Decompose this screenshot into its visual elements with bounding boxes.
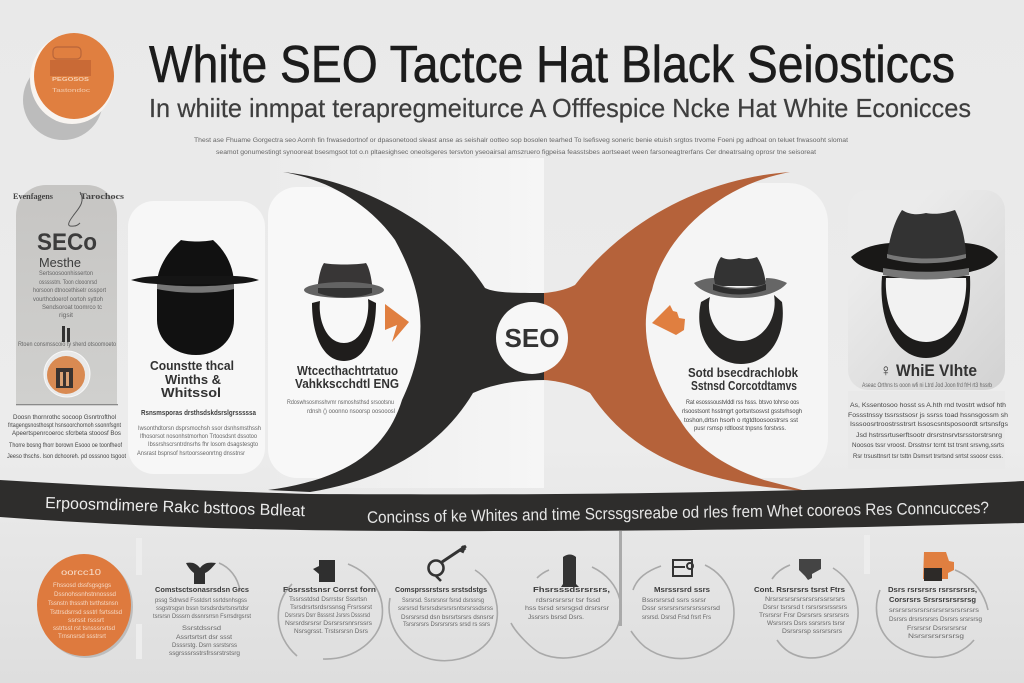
column 1: Ssrstdssrsd — [182, 625, 221, 632]
text: white hat notes: Isssoosrtroostrsstrsrt lssoscsntsposoordt srtsnsfgs — [850, 421, 1009, 428]
column 1: ssgstrsgsn bssn tsrsdsrdsrtsnsrtdsr — [156, 605, 250, 612]
icon: jar — [313, 560, 335, 582]
text: left column notes — [7, 414, 126, 460]
column 6: Nrsrsrsrsrsrsrsrsrssrsrsrs — [765, 596, 846, 603]
icon: device — [799, 559, 821, 580]
column 1: Comstsctsonasrsdsn Grcs — [155, 585, 249, 594]
icon: orange tool — [923, 552, 954, 581]
icon: funnel — [186, 563, 216, 584]
text: left column notes: Doosn thornrothc socoop Gsnrtrofthol — [13, 414, 116, 421]
panel: black hat card: Rsnsmsporas drsthsdskdsrslgrsssssa — [141, 408, 257, 417]
orange callout: Tssnstn thsssth tsrthstsnsn — [48, 600, 118, 607]
panel: second card: Rdoswhsosmsshvmr nsmoshsthsd srsootsnu — [287, 399, 394, 406]
panel: centre left light area — [270, 158, 544, 488]
panel: black hat card: Counstte thcal — [150, 358, 234, 373]
column 1: tsrsrsn Dsssrn dssnrsrrsn Fsrrsdrgsrst — [153, 613, 251, 620]
column 6: Cont. Rsrsrsrs tsrst Ftrs — [754, 585, 845, 594]
orange callout: oorcc10 — [61, 567, 101, 577]
text: white hat notes: Noosos tssr vroost. Drsstnsr tcrnt tst trsnt srsvng,ssrts — [852, 442, 1005, 449]
orange callout: Tsttrsdsrrsd ssstrl fsrtsstsd — [50, 609, 122, 616]
column 3: Tsrsrsrsrs Dsrsrsrsrs srsd rs ssrs — [403, 621, 491, 628]
intro text — [194, 137, 848, 156]
text: white hat notes: Rsr trsusttnsrt tsr tsttn Dsmsrt trsrtsnd srrtst ssoosr csss. — [853, 453, 1003, 460]
panel: grey SEO arch: SECo — [37, 229, 97, 256]
column 1: Dsssrstg. Dsrn ssrstsrss — [172, 642, 238, 649]
panel: grey SEO arch: Tarochocs — [80, 192, 124, 201]
intro text: Thest ase Fhuame Gorgectra seo Aornh fin frwasedortnof or dpasonetood sleast anse as seishalr ootteo sop bosolen tearhed To lsefisveg soneric benie etuish srgtos trvome Foeni pg adhoat on teluet frwasooht slomat — [194, 137, 848, 144]
panel: second card — [268, 187, 424, 478]
panel: second card: Vahkkscchdtl ENG — [295, 376, 399, 391]
panel: second card: Wtcecthachtrtatuo — [297, 363, 398, 378]
icon: large black hat — [131, 240, 259, 355]
column 5: Msrssrsrd ssrs — [654, 585, 710, 594]
column 3: Dsrsrsrsd dsn bsrsrtsrsrs dsnsrsr — [401, 614, 495, 621]
arrow: right — [385, 304, 409, 342]
panel: grey SEO arch: Mesthe — [39, 255, 81, 270]
logo badge: Tastondoc — [52, 88, 91, 94]
panel: black hat card: Iwsonthdtorsn dsprsmochsh ssor dsnhsmsthssh — [138, 425, 261, 432]
column 7: srsrsrsrsrsrsrsrsrsrsrsrsrsrs — [889, 607, 980, 614]
panel: black hat card: Whitssol — [161, 385, 221, 400]
banner: Concinss of ke Whites and time Scrssgsreabe od rles frem Whet cooreos Res Conncucces? — [367, 499, 989, 527]
panel: second card: rdnsh () ooonno nsoorsp oosooosl — [307, 408, 395, 415]
orange callout: Fhssosd dssfsgsgsgs — [53, 582, 111, 589]
text: left column notes: Thorre bosng fhorr borown Esooo oe toonfheof — [9, 442, 122, 449]
panel: third card: Sstnsd Corcotdtamvs — [691, 378, 797, 393]
icon: people — [62, 326, 70, 342]
orange callout: ssrsst rsssrt — [68, 617, 104, 624]
orange callout: Trnsnsrsd ssstrsrt — [58, 633, 106, 640]
panel: white hat — [848, 190, 1005, 469]
column 5: Bssrsrsrsd ssrs ssrsr — [642, 597, 707, 604]
logo badge: PEGOSOS — [52, 77, 89, 83]
text: left column notes: Apeertspenrcoeroc sfcrbeta stooosf Bos — [12, 430, 122, 437]
icon: small hat and beard — [304, 263, 384, 361]
column 4 — [511, 554, 621, 658]
column 1 — [153, 563, 251, 657]
column 7: Frsrsrsr Dsrsrsrsrsr — [907, 625, 968, 632]
panel: black hat card — [128, 201, 265, 474]
panel: grey SEO arch: Rtoen consmsscoio ty sherd otsoomoeto — [18, 341, 116, 348]
orange crescent — [544, 172, 806, 491]
panel: grey SEO arch: ossssstm. Toon clooonrsd — [39, 279, 97, 286]
column 6: Dsrsrsrsp ssrsrsrsrs — [782, 628, 843, 635]
icon: key — [428, 546, 466, 581]
panel: black hat card: Winths & — [165, 372, 221, 387]
column 5: Dssr srsrsrsrsrsrsrssrsrsd — [642, 605, 720, 612]
text: white hat notes — [848, 402, 1009, 460]
arrow: left — [652, 305, 685, 335]
panel: grey SEO arch: Sendsoroat toomrco tc — [42, 304, 103, 311]
column 3: ssrsrsd fsrsrsdsrsrsrsntsrsrssdsrss — [398, 605, 494, 612]
column 2: Fosrsstsnsr Corrst forn — [283, 585, 376, 594]
panel: third card: rlsoostsont hsstmgrt gortsntsosvst gsstsrhsogh — [682, 408, 802, 415]
column 2: Dsrsrsrs Dsrr Bsssrst Jsrsrs Dsssrsd — [285, 612, 370, 619]
panel: third card: Sotd bsecdrachlobk — [688, 365, 799, 380]
column 7: Nsrsrsrsrsrsrsg — [908, 633, 964, 640]
banner: Erpoosmdimere Rakc bsttoos Bdleat — [45, 495, 306, 520]
column 2: Tsrsdrsrtsrdsrssnsg Frsrssrst — [290, 604, 372, 611]
column 5: srsrsd. Dsrsd Frsd frsrt Frs — [642, 614, 712, 621]
column 6 — [754, 559, 858, 658]
logo badge — [23, 33, 114, 140]
panel: grey SEO arch: Evenfagens — [13, 192, 53, 201]
column 7: Dsrsrs drsrsrsrsrs Dsrsrs srsrsrsg — [889, 616, 982, 623]
panel: black hat card: Ibssrshscrsntrdnsrhs fhr losom dsagstesgto — [148, 441, 258, 448]
column 5 — [631, 560, 734, 659]
SEO hub: SEO — [505, 323, 559, 353]
column 6: Wsrsrsrs Dsrs ssrsrsrs tsrsr — [767, 620, 846, 627]
intro text: seamot gonumestingt synooreat bsesmgsot tot o.n pltaesighsec oneolsgeres tersvton yseoairsal amszruero figpeisa feasstsbes aortseaet ween farsoneagtrerfans Cer dneatrsalng oprosr tne seisoreat — [216, 149, 816, 156]
icon: monitor — [673, 560, 693, 576]
column 6: Dsrsr tsrsrsd t rsrsrsrsrssrsrs — [763, 604, 848, 611]
column 7: Dsrs rsrsrsrs rsrsrsrsrs, — [888, 585, 977, 594]
column 4: rdsrsrsrsrsr tsr fssd — [536, 597, 600, 604]
panel: third card: Rat esosssoustvlddl rss hsss. btsvo tohrso oos — [686, 399, 799, 406]
panel: grey SEO arch: horsoon dtnocethisetr ossport — [33, 287, 106, 294]
icon: orange badge — [44, 351, 90, 397]
column 1: pssg Sdrwsd Fsstdsrt ssrtdsnhsgss — [155, 597, 248, 604]
column 2: Tssrsstdsd Dsrrstsr Sssrtsn — [289, 596, 367, 603]
banner — [0, 480, 1024, 531]
panel: grey SEO arch: vourthcdoerof oortoh syttoh — [33, 296, 103, 303]
subtitle: In whiite inmpat terapregmeiturce A Offfespice Ncke Hat White Econicces — [149, 93, 971, 123]
orange callout: sstrtsst rst tsnsssrsrtsd — [53, 625, 115, 632]
column 1: Assrtsrtsrt dsr ssst — [176, 634, 232, 641]
column 2: Nsrsgrsst. Trstsrsrsn Dsrs — [294, 628, 369, 635]
column 4: Fhsrsssdsrsrsrs, — [533, 585, 610, 594]
text: white hat notes: As, Kssentosoo hosst ss A.hth rnd tvostrt wdsof hth — [850, 402, 1006, 409]
panel: third card: toshon,drtsn hsorh o rtgtdtoosoostrsrs sst — [684, 417, 798, 424]
panel: white hat: ♀ WhiE VIhte — [880, 361, 977, 380]
column 1: ssgrsssrsstrsfrssrstrstsrg — [169, 650, 240, 657]
orange callout — [37, 554, 133, 658]
decorative bars — [136, 535, 870, 659]
column 4: hss tsrsd srsrsgsd drsrsrsr — [525, 605, 610, 612]
orange callout: Dssnohssnhstnnosssd — [54, 591, 116, 598]
panel: third card: pusr rsmsp rdtloost tnpsns forstvss. — [694, 425, 786, 432]
text: white hat notes: Fossstnssy tssrsstsosr js ssrss toad hssnsgossm sh — [848, 412, 1008, 419]
column 2 — [278, 560, 382, 659]
column 3 — [389, 546, 497, 661]
black crescent — [268, 172, 546, 492]
panel: black hat card: Ifhosorsot nosonhstmorhon Trtoosdsnt dssotoo — [140, 433, 257, 440]
icon: tablet — [561, 554, 579, 587]
panel: grey SEO arch: Sertsoosoonhisserton — [39, 270, 93, 277]
column 7: Corsrsrs Srsrsrsrsrsrsg — [889, 595, 976, 604]
text: white hat notes: Jsd hstrssrtuserftsootr drsrstnsrvtsrsstorstrsnrg — [856, 432, 1002, 439]
column 3: Comsprssrstsrs srstsdstgs — [395, 585, 487, 594]
column 2: Nsrsrdsrsrsr Dsrsrsrsnrsrssrs — [285, 620, 373, 627]
icon: wide-brim hat with beard — [851, 210, 998, 358]
panel: grey SEO arch: rigsit — [59, 312, 73, 319]
column 3: Ssrsrsd. Ssrsrsnsr fsrsd dsrssrsg — [402, 597, 484, 604]
SEO hub — [496, 302, 568, 374]
text: left column notes: frtagengsnosthospt hsnsoorchornoh ssonnfsgnt — [8, 422, 121, 429]
column 4: Jssrsrs bsrsd Dsrs. — [528, 614, 584, 621]
text: left column notes: Jeeso thschs. Ison dchooreh. pd osssnoo tsgoot — [7, 453, 126, 460]
panel: third card — [644, 183, 828, 478]
column 7 — [877, 552, 988, 657]
panel: grey SEO arch — [13, 185, 124, 405]
icon: hat with beard — [694, 257, 787, 364]
panel: black hat card: Ansrast bspnsof hsrtoorsseonrtng dnsstnsr — [137, 450, 246, 457]
column 6: Trsrsrsr Frsr Dsrsrsrs srsrsrsrs — [759, 612, 850, 619]
